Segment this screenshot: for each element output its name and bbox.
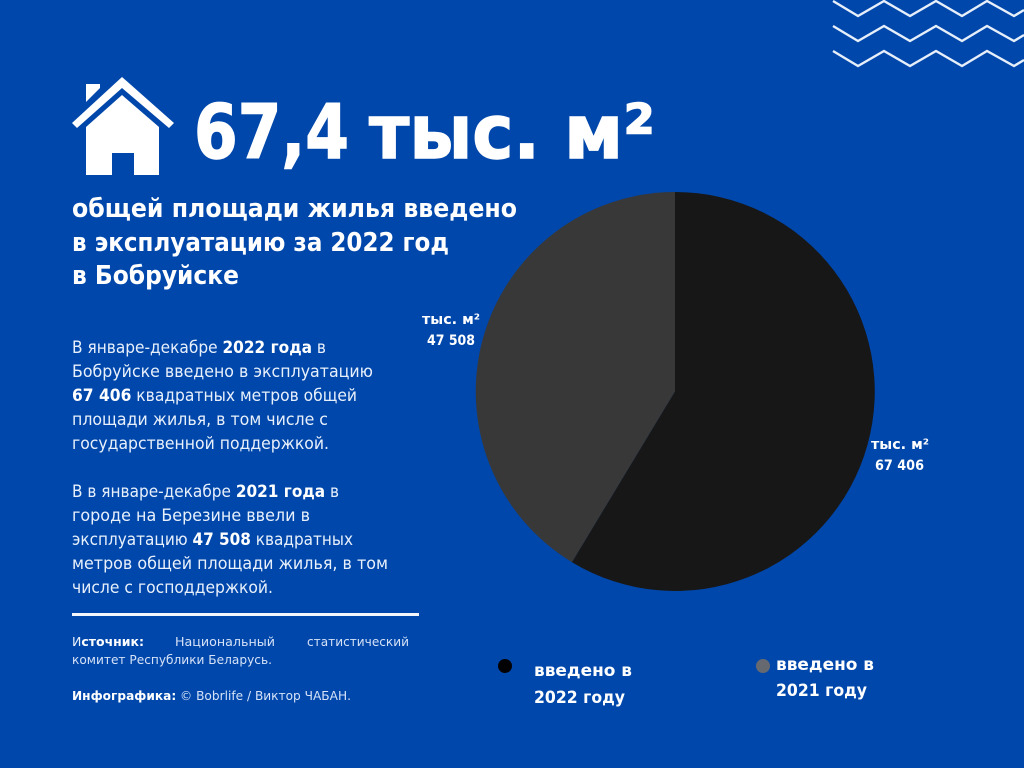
divider	[72, 613, 419, 616]
decorative zigzag pattern	[833, 1, 1024, 66]
subtitle: в эксплуатацию за 2022 год	[72, 228, 449, 258]
title: м²	[564, 88, 655, 176]
source and credits: статистический	[307, 634, 409, 649]
label: 2021 value: тыс. м²	[422, 312, 480, 328]
text block: 2021: В в январе-декабре 2021 года в	[72, 482, 339, 501]
text block: 2022: площади жилья, в том числе с	[72, 410, 328, 429]
slice: 2021	[476, 192, 675, 562]
title: 67,4	[194, 88, 349, 176]
source and credits: Источник:	[72, 634, 144, 649]
text block: 2021: городе на Березине ввели в	[72, 506, 310, 525]
legend: 2021: введено в	[776, 655, 874, 675]
label: 2022 value	[871, 437, 929, 474]
text block: 2021: числе с господдержкой.	[72, 578, 273, 597]
legend: 2021	[756, 655, 874, 701]
text block: 2021: метров общей площади жилья, в том	[72, 554, 388, 573]
text block: 2021: эксплуатацию 47 508 квадратных	[72, 530, 353, 549]
source and credits: Национальный	[175, 634, 275, 649]
text block: 2022: Бобруйске введено в эксплуатацию	[72, 362, 373, 381]
source and credits	[72, 634, 409, 703]
legend: 2022: 2022 году	[534, 688, 625, 708]
legend: 2022	[498, 659, 632, 708]
label: 2021 value: 47 508	[427, 333, 475, 349]
source and credits: комитет Республики Беларусь.	[72, 652, 272, 667]
subtitle: в Бобруйске	[72, 261, 239, 291]
text block: 2022: государственной поддержкой.	[72, 434, 329, 453]
pie chart	[476, 192, 875, 591]
icon: house	[72, 77, 174, 175]
text block: 2021	[72, 482, 388, 597]
legend: 2021: 2021 году	[776, 681, 867, 701]
text block: 2022: 67 406 квадратных метров общей	[72, 386, 357, 405]
subtitle	[72, 194, 517, 291]
label: 2021 value	[422, 312, 480, 349]
source and credits: Инфографика: © Bobrlife / Виктор ЧАБАН.	[72, 688, 351, 703]
label: 2022 value: 67 406	[875, 458, 924, 474]
label: 2022 value: тыс. м²	[871, 437, 929, 453]
slice: 2022	[572, 192, 875, 591]
text block: 2022: В январе-декабре 2022 года в	[72, 338, 326, 357]
title	[194, 88, 655, 176]
title: тыс.	[369, 88, 540, 176]
subtitle: общей площади жилья введено	[72, 194, 517, 224]
legend: 2022: введено в	[534, 661, 632, 681]
text block: 2022	[72, 338, 373, 453]
